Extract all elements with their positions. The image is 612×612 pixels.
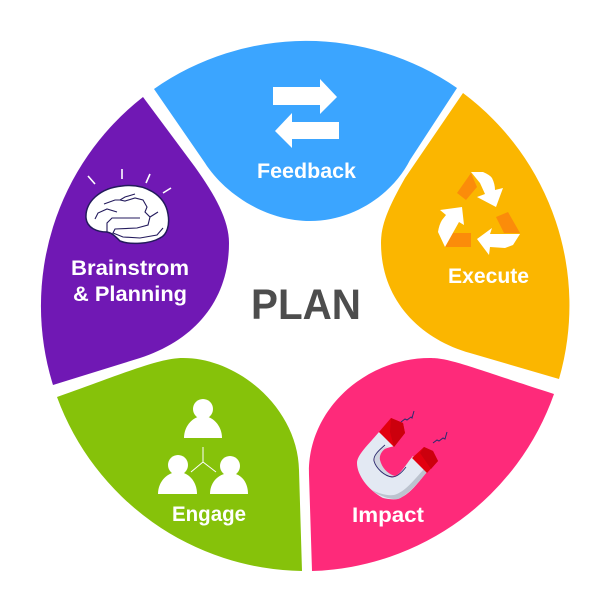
label: brainstrom and planning xyxy=(71,257,189,306)
engage petal xyxy=(57,358,302,571)
icon: recycle arrows xyxy=(438,172,520,255)
label: brainstrom and planning: Brainstrom xyxy=(71,257,189,280)
icon: horseshoe magnet xyxy=(357,411,447,499)
brainstorm petal xyxy=(41,97,229,385)
label: brainstrom and planning: & Planning xyxy=(73,283,187,306)
icon: two opposing arrows xyxy=(273,79,339,148)
label: feedback: Feedback xyxy=(257,160,356,183)
panel: brainstorm and planning xyxy=(41,97,229,385)
panel: execute xyxy=(381,93,569,379)
execute petal xyxy=(381,93,569,379)
icon: brain with rays xyxy=(86,169,171,243)
title: plan: PLAN xyxy=(251,281,361,329)
impact petal xyxy=(309,358,554,571)
label: impact: Impact xyxy=(352,504,424,527)
label: engage: Engage xyxy=(172,503,246,526)
panel: engage xyxy=(57,358,302,571)
panel: feedback xyxy=(154,41,457,221)
feedback petal xyxy=(154,41,457,221)
icon: three connected people xyxy=(158,399,248,494)
panel: impact xyxy=(309,358,554,571)
label: execute: Execute xyxy=(448,265,529,288)
